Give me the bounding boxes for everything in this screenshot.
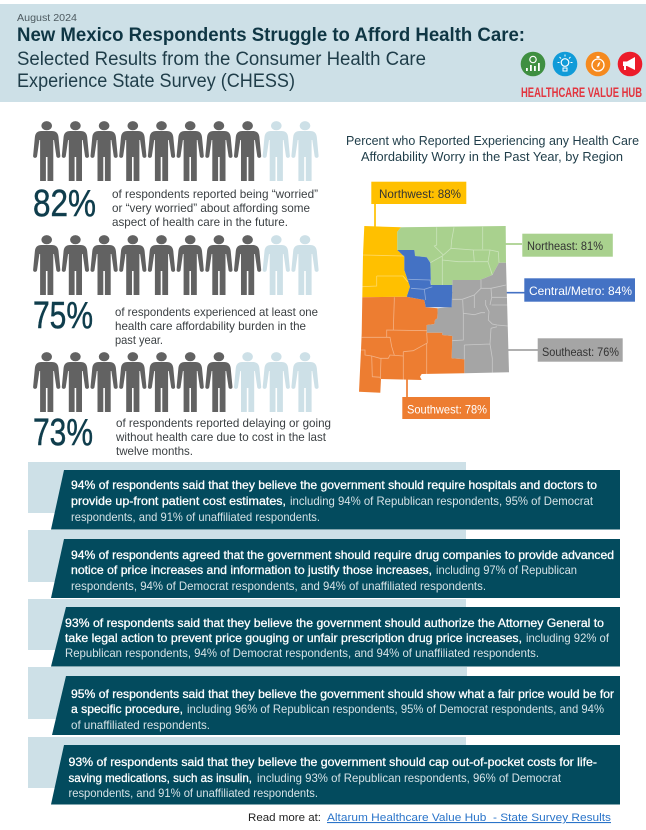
banner 4: fair price: including 96% of Republican respondents, 95% of Democrat respondents, and 94% bbox=[187, 703, 604, 716]
label: Northwest bbox=[371, 182, 466, 204]
label: Southwest: Southwest: 78% bbox=[407, 402, 487, 416]
region: Southwest bbox=[359, 297, 464, 393]
banner 5: insulin cap: saving medications, such as insulin, bbox=[68, 772, 252, 785]
people row: 73% bbox=[33, 352, 319, 412]
stat text: worried bbox=[112, 187, 318, 229]
banner 1: cost estimates: provide up-front patient cost estimates, bbox=[71, 495, 286, 508]
footer: read more: Read more at: bbox=[248, 812, 321, 824]
label: Southeast bbox=[538, 338, 623, 362]
stat text: burden: past year. bbox=[115, 333, 163, 347]
banner 5: insulin cap: respondents, and 91% of unaffiliated respondents. bbox=[68, 787, 318, 800]
banner 1: cost estimates: including 94% of Republican respondents, 95% of Democrat bbox=[290, 495, 594, 508]
banner 5: insulin cap: 93% of respondents said that they believe the government should cap out-of-pocket costs for life- bbox=[68, 756, 597, 769]
label: Northeast: Northeast: 81% bbox=[527, 239, 603, 253]
label: Northwest: Northwest: 88% bbox=[379, 187, 461, 201]
subtitle: Selected Results from the Consumer Health Care bbox=[17, 49, 426, 70]
subtitle bbox=[17, 49, 426, 92]
region: Southeast bbox=[427, 263, 509, 373]
region: Central/Metro bbox=[397, 250, 452, 307]
date: August 2024 bbox=[17, 13, 77, 24]
label: Central/Metro bbox=[524, 278, 635, 302]
county lines bbox=[361, 227, 508, 380]
label: Southeast: Southeast: 76% bbox=[542, 345, 619, 359]
stat text: delaying care: without health care due to cost in the last bbox=[115, 430, 327, 444]
icon: megaphone bbox=[618, 52, 642, 76]
map of New Mexico regions bbox=[359, 182, 635, 419]
people row: 75% bbox=[33, 235, 319, 295]
banner 3: price gouging: 93% of respondents said that they believe the government should authorize the Attorney General to bbox=[65, 617, 604, 630]
banner 4: fair price: of unaffiliated respondents. bbox=[71, 719, 210, 732]
logo: Healthcare Value Hub bbox=[521, 52, 642, 100]
banner 3: price gouging: including 92% of bbox=[526, 632, 610, 645]
banner 1: cost estimates bbox=[51, 470, 620, 530]
stat: 75%: 75% bbox=[33, 295, 93, 337]
stat: 73%: 73% bbox=[33, 412, 93, 454]
icon: chart bbox=[521, 52, 545, 76]
subtitle: Experience State Survey (CHESS) bbox=[17, 71, 295, 92]
banner 2: drug price notice: including 97% of Republican bbox=[436, 564, 577, 577]
icon: light bulb bbox=[553, 52, 577, 76]
banner 1: cost estimates: 94% of respondents said that they believe the government should require hospitals and doctors to bbox=[71, 479, 597, 492]
stat text: delaying care bbox=[115, 416, 331, 458]
banner 5: insulin cap: including 93% of Republican respondents, 96% of Democrat bbox=[257, 772, 562, 785]
banner 2: drug price notice: 94% of respondents agreed that the government should require drug companies to provide advanced bbox=[71, 549, 614, 562]
label: Central/Metro: Central/Metro: 84% bbox=[529, 284, 632, 298]
banner 3: price gouging bbox=[51, 607, 620, 666]
stat text: burden: of respondents experienced at least one bbox=[115, 305, 318, 319]
icon: compass bbox=[586, 52, 610, 76]
stat text: burden: health care affordability burden in the bbox=[115, 319, 306, 333]
map heading bbox=[346, 134, 639, 164]
stat text: burden bbox=[115, 305, 318, 347]
banner 1: cost estimates: respondents, and 91% of unaffiliated respondents. bbox=[71, 511, 320, 524]
people row: 82% bbox=[33, 121, 319, 181]
map heading: Affordability Worry in the Past Year, by Region bbox=[361, 150, 623, 164]
connectors bbox=[375, 204, 538, 397]
footer: read more bbox=[248, 812, 612, 824]
stat text: delaying care: of respondents reported delaying or going bbox=[116, 416, 331, 430]
banner 4: fair price bbox=[52, 676, 620, 735]
banner 5: insulin cap bbox=[51, 745, 620, 804]
banner 3: price gouging: Republican respondents, 94% of Democrat respondents, and 94% of unaffiliated respondents. bbox=[65, 647, 539, 660]
region: Northwest bbox=[362, 226, 410, 297]
title: New Mexico Respondents Struggle to Afford Health Care: bbox=[17, 25, 525, 46]
stat text: worried: or “very worried” about affording some bbox=[112, 201, 310, 215]
stat text: worried: of respondents reported being “worried” bbox=[112, 187, 318, 201]
link: Altarum Healthcare Value Hub - State Survey Results bbox=[327, 812, 612, 824]
stat text: delaying care: twelve months. bbox=[116, 444, 193, 458]
header band bbox=[0, 4, 646, 102]
banner 3: price gouging: take legal action to prevent price gouging or unfair prescription drug price increases, bbox=[65, 632, 522, 645]
map heading: Percent who Reported Experiencing any Health Care bbox=[346, 134, 639, 148]
label: Southwest bbox=[402, 397, 490, 419]
banner 4: fair price: 95% of respondents said that they believe the government should show what a fair price would be for bbox=[71, 688, 614, 701]
banner 2: drug price notice bbox=[51, 539, 620, 598]
banner 4: fair price: a specific procedure, bbox=[71, 703, 183, 716]
region: Northeast bbox=[397, 226, 506, 285]
banner 2: drug price notice: respondents, 94% of Democrat respondents, and 94% of unaffiliated respondents. bbox=[71, 580, 486, 593]
pale banner backings bbox=[28, 462, 467, 788]
stat: 82%: 82% bbox=[33, 183, 96, 225]
banner 2: drug price notice: notice of price increases and information to justify those increases, bbox=[71, 564, 432, 577]
label: Northeast bbox=[522, 234, 613, 257]
stat text: worried: aspect of health care in the future. bbox=[112, 215, 288, 229]
